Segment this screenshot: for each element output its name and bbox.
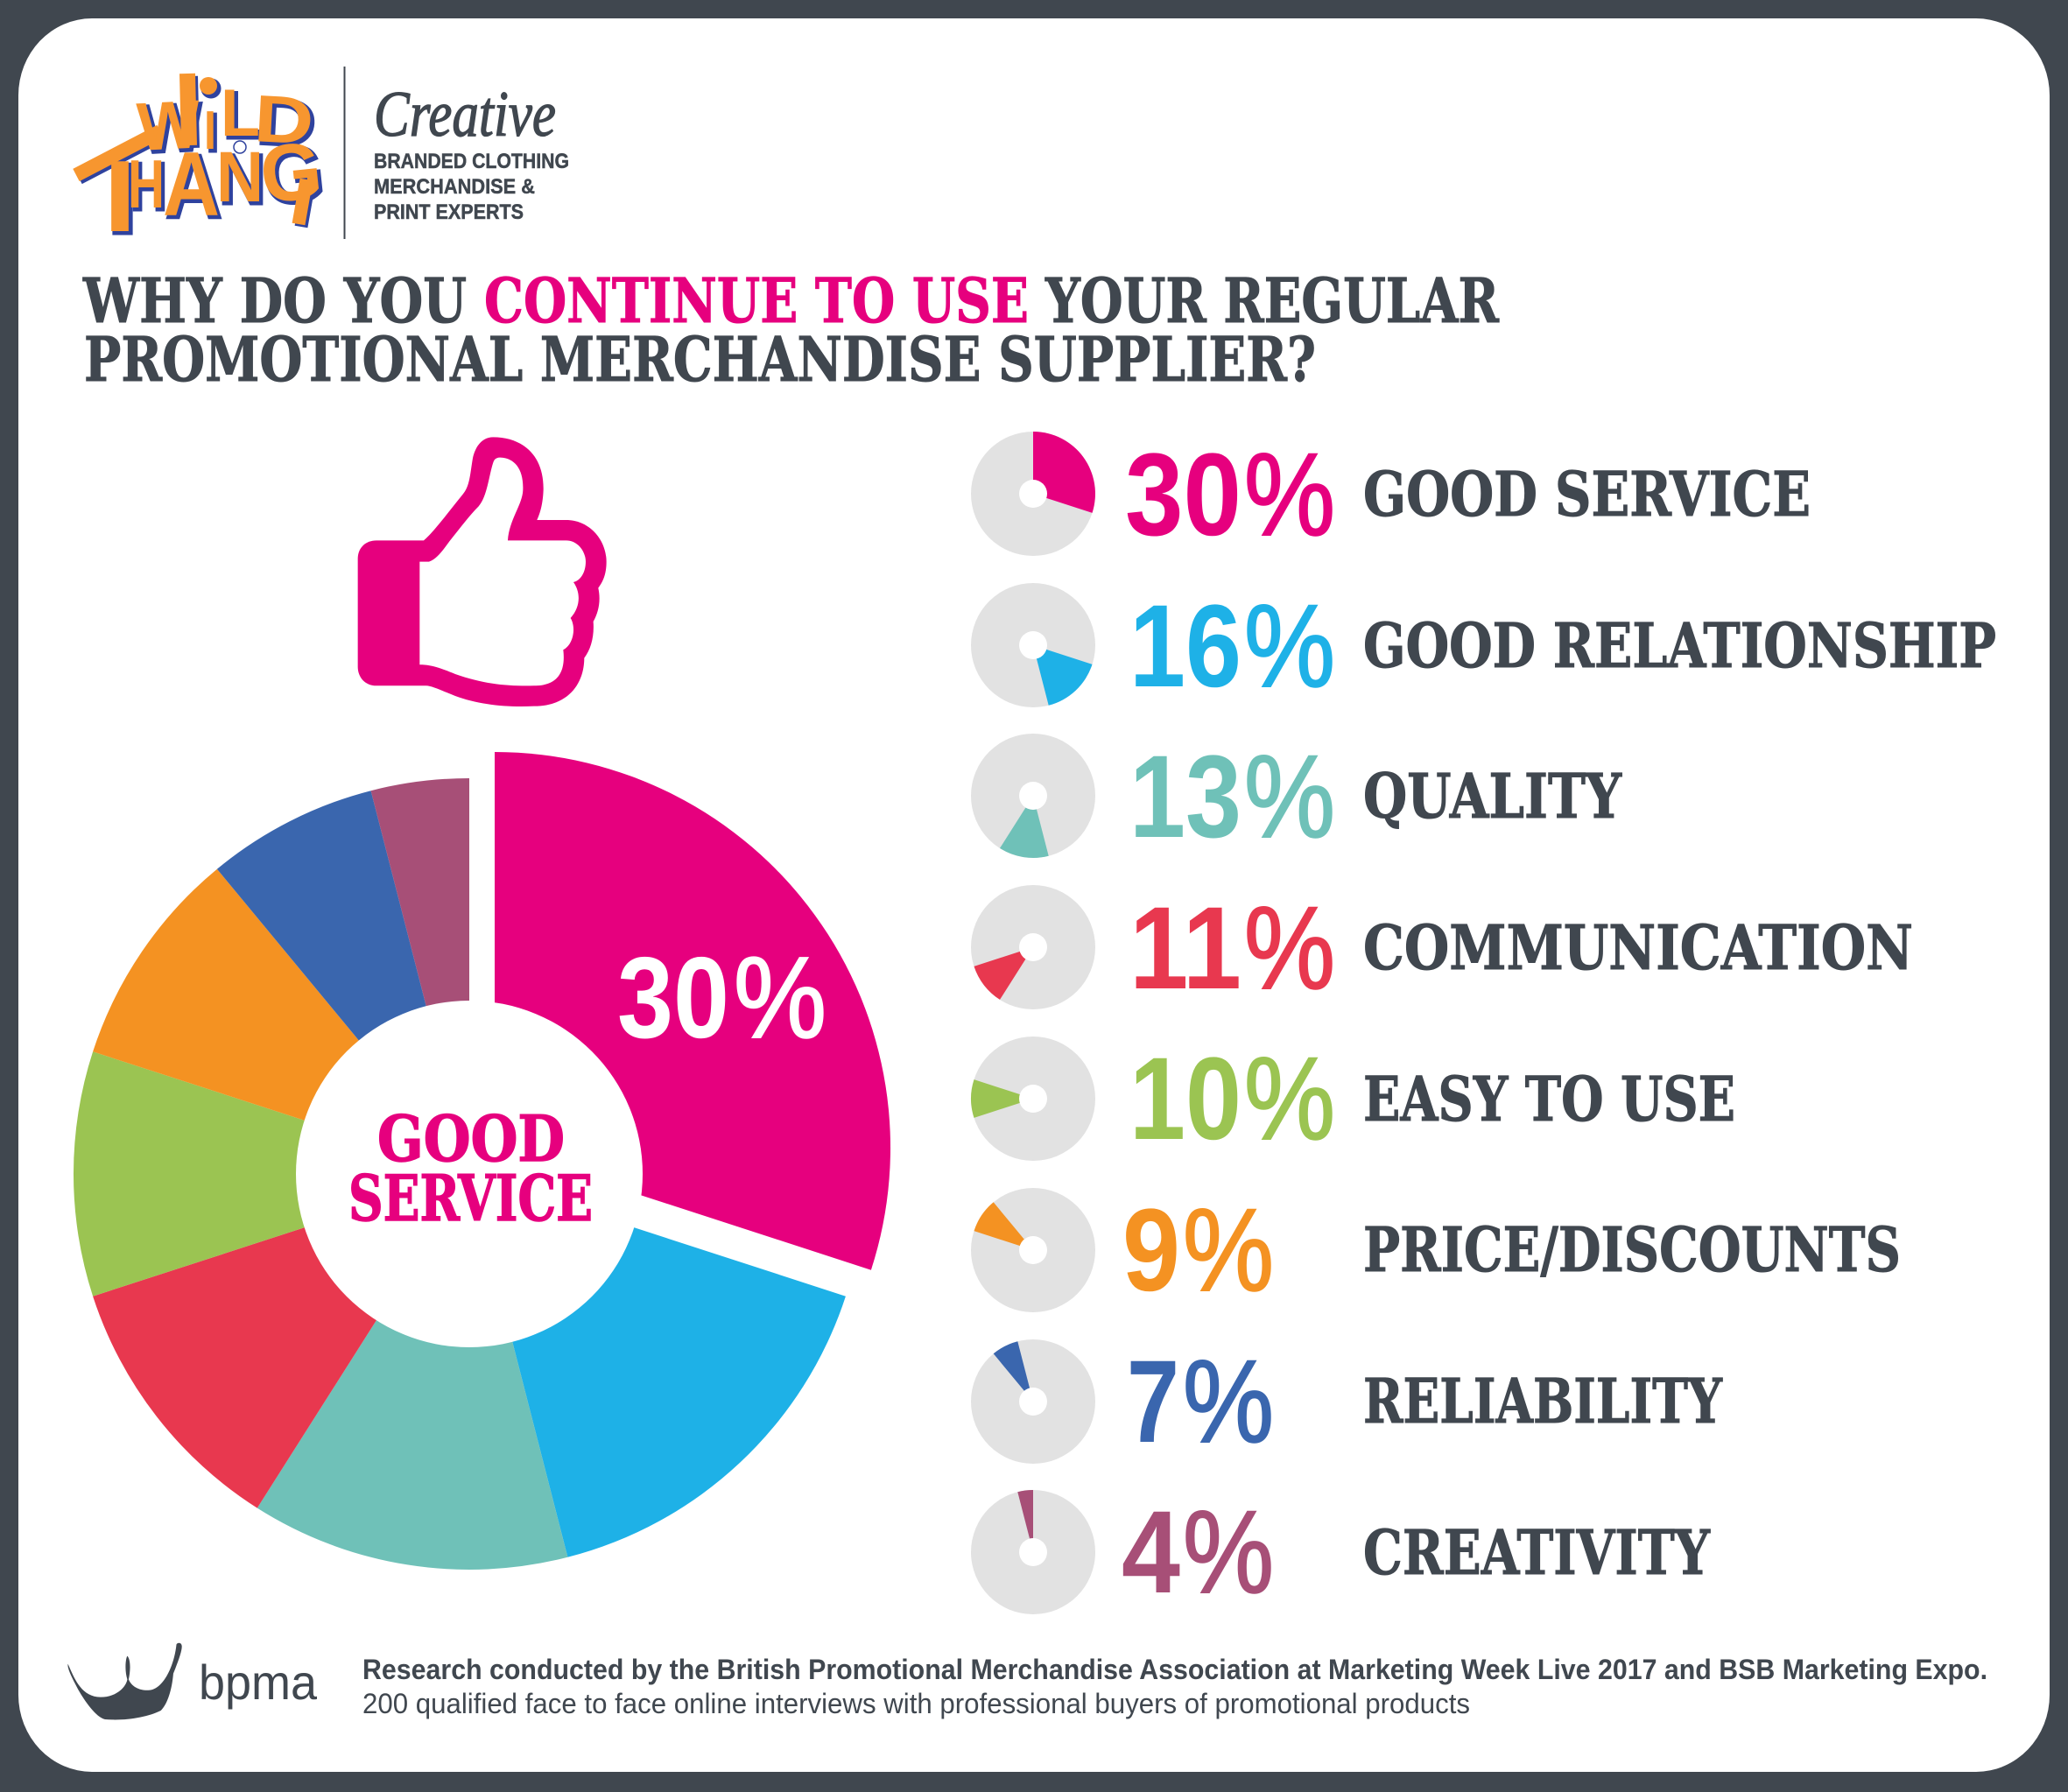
logo: Wild Thang: I xyxy=(103,139,137,253)
row: 4% creativity: 4 xyxy=(1122,1487,1180,1618)
logo: Wild Thang: G xyxy=(256,125,327,221)
logo divider xyxy=(343,67,345,239)
source note: Research conducted by the British Promotional Merchandise Association at Marketing Week Live 2017 and BSB Marketing Expo. xyxy=(362,1654,1987,1685)
title: CONTINUE TO USE xyxy=(484,264,1029,337)
donut centre label: SERVICE xyxy=(348,1161,593,1235)
logo: Wild Thang: I xyxy=(204,101,216,161)
donut hole xyxy=(296,1001,643,1347)
slice: good relationship 16% xyxy=(469,1174,846,1557)
row: 9% price/discounts: 9 xyxy=(1122,1185,1180,1316)
logo: Wild Thang: I xyxy=(106,142,139,256)
row: 13% quality: QUALITY xyxy=(1363,760,1622,833)
donut value: 30%: 30 xyxy=(617,933,729,1062)
logo: Wild Thang: N xyxy=(219,140,266,220)
row: 9% price/discounts: % xyxy=(1183,1185,1274,1316)
logo: Wild Thang: L xyxy=(223,79,263,153)
row: 30% good service: 30 xyxy=(1125,430,1242,560)
row: 11% communication: % xyxy=(1244,883,1335,1014)
logo: Wild Thang: W xyxy=(137,88,205,168)
row: 10% easy to use: 10 xyxy=(1129,1034,1242,1164)
row: 11% communication: COMMUNICATION xyxy=(1363,911,1913,984)
row: 9% price/discounts xyxy=(971,1185,1901,1316)
logo: Wild Thang: H xyxy=(130,148,167,225)
logo: Wild Thang: A xyxy=(163,134,220,235)
row: 7% reliability xyxy=(971,1337,1723,1467)
row: 13% quality xyxy=(971,732,1622,862)
row: 7% reliability: RELIABILITY xyxy=(1363,1365,1723,1437)
logo strapline: Creative: PRINT EXPERTS xyxy=(374,200,524,224)
donut centre label: GOOD xyxy=(377,1101,565,1176)
slice: reliability 7% xyxy=(217,791,469,1174)
slice: communication 11% xyxy=(93,1174,469,1508)
logo: Wild Thang: G xyxy=(258,128,329,223)
row: 7% reliability: 7 xyxy=(1127,1337,1179,1467)
row: 16% good relationship: 16 xyxy=(1129,581,1242,712)
icon: bpma crown xyxy=(67,1643,182,1719)
row: 7% reliability: % xyxy=(1183,1337,1274,1467)
logo: Wild Thang: L xyxy=(221,76,260,151)
logo: Wild Thang: H xyxy=(128,145,165,222)
row: 11% communication xyxy=(971,883,1913,1014)
row: 10% easy to use xyxy=(971,1034,1735,1164)
donut centre label xyxy=(348,1101,593,1235)
row: 11% communication: 11 xyxy=(1129,883,1242,1014)
logo strapline: Creative xyxy=(374,79,569,224)
title: WHY DO YOU xyxy=(82,264,467,337)
logo: Wild Thang: D xyxy=(252,81,315,159)
row: 13% quality: % xyxy=(1244,732,1335,862)
slice: good service 30% xyxy=(495,752,890,1270)
slice: quality 13% xyxy=(257,1174,567,1570)
row: 10% easy to use: EASY TO USE xyxy=(1363,1063,1735,1135)
row: 10% easy to use: % xyxy=(1244,1034,1335,1164)
logo strapline: Creative: Creative xyxy=(374,79,556,151)
source note: 200 qualified face to face online interviews with professional buyers of promotional products xyxy=(362,1688,1470,1719)
donut chart xyxy=(74,752,890,1570)
title: PROMOTIONAL MERCHANDISE SUPPLIER? xyxy=(84,323,1316,396)
source note xyxy=(362,1654,1987,1719)
donut value: 30% xyxy=(617,933,826,1062)
row: 13% quality: 13 xyxy=(1129,732,1242,862)
title: YOUR REGULAR xyxy=(1045,264,1500,337)
slice: easy to use 10% xyxy=(74,1051,469,1297)
donut value: 30%: % xyxy=(734,933,826,1062)
row: 4% creativity xyxy=(971,1487,1711,1618)
logo strapline: Creative: BRANDED CLOTHING xyxy=(374,150,569,173)
row: 30% good service xyxy=(971,430,1811,560)
slice: price/discounts 9% xyxy=(93,869,469,1174)
icon: thumbs up xyxy=(358,437,607,706)
bpma wordmark: bpma xyxy=(199,1655,318,1710)
slice: creativity 4% xyxy=(371,778,469,1174)
row: 9% price/discounts: PRICE/DISCOUNTS xyxy=(1363,1213,1901,1286)
title xyxy=(82,264,1500,396)
logo: Wild Thang: W xyxy=(135,85,202,165)
logo: Wild Thang: D xyxy=(255,84,318,162)
row: 30% good service: % xyxy=(1244,430,1335,560)
row: 4% creativity: % xyxy=(1183,1487,1274,1618)
row: 16% good relationship xyxy=(971,581,1996,712)
logo: Wild Thang: N xyxy=(216,137,264,217)
logo strapline: Creative: MERCHANDISE & xyxy=(374,175,535,199)
logo: Wild Thang: A xyxy=(165,137,222,238)
logo: Wild Thang xyxy=(76,74,329,256)
row: 16% good relationship: % xyxy=(1244,581,1335,712)
logo: Wild Thang: I xyxy=(207,103,219,164)
row: 4% creativity: CREATIVITY xyxy=(1363,1516,1711,1589)
row: 30% good service: GOOD SERVICE xyxy=(1363,458,1811,531)
